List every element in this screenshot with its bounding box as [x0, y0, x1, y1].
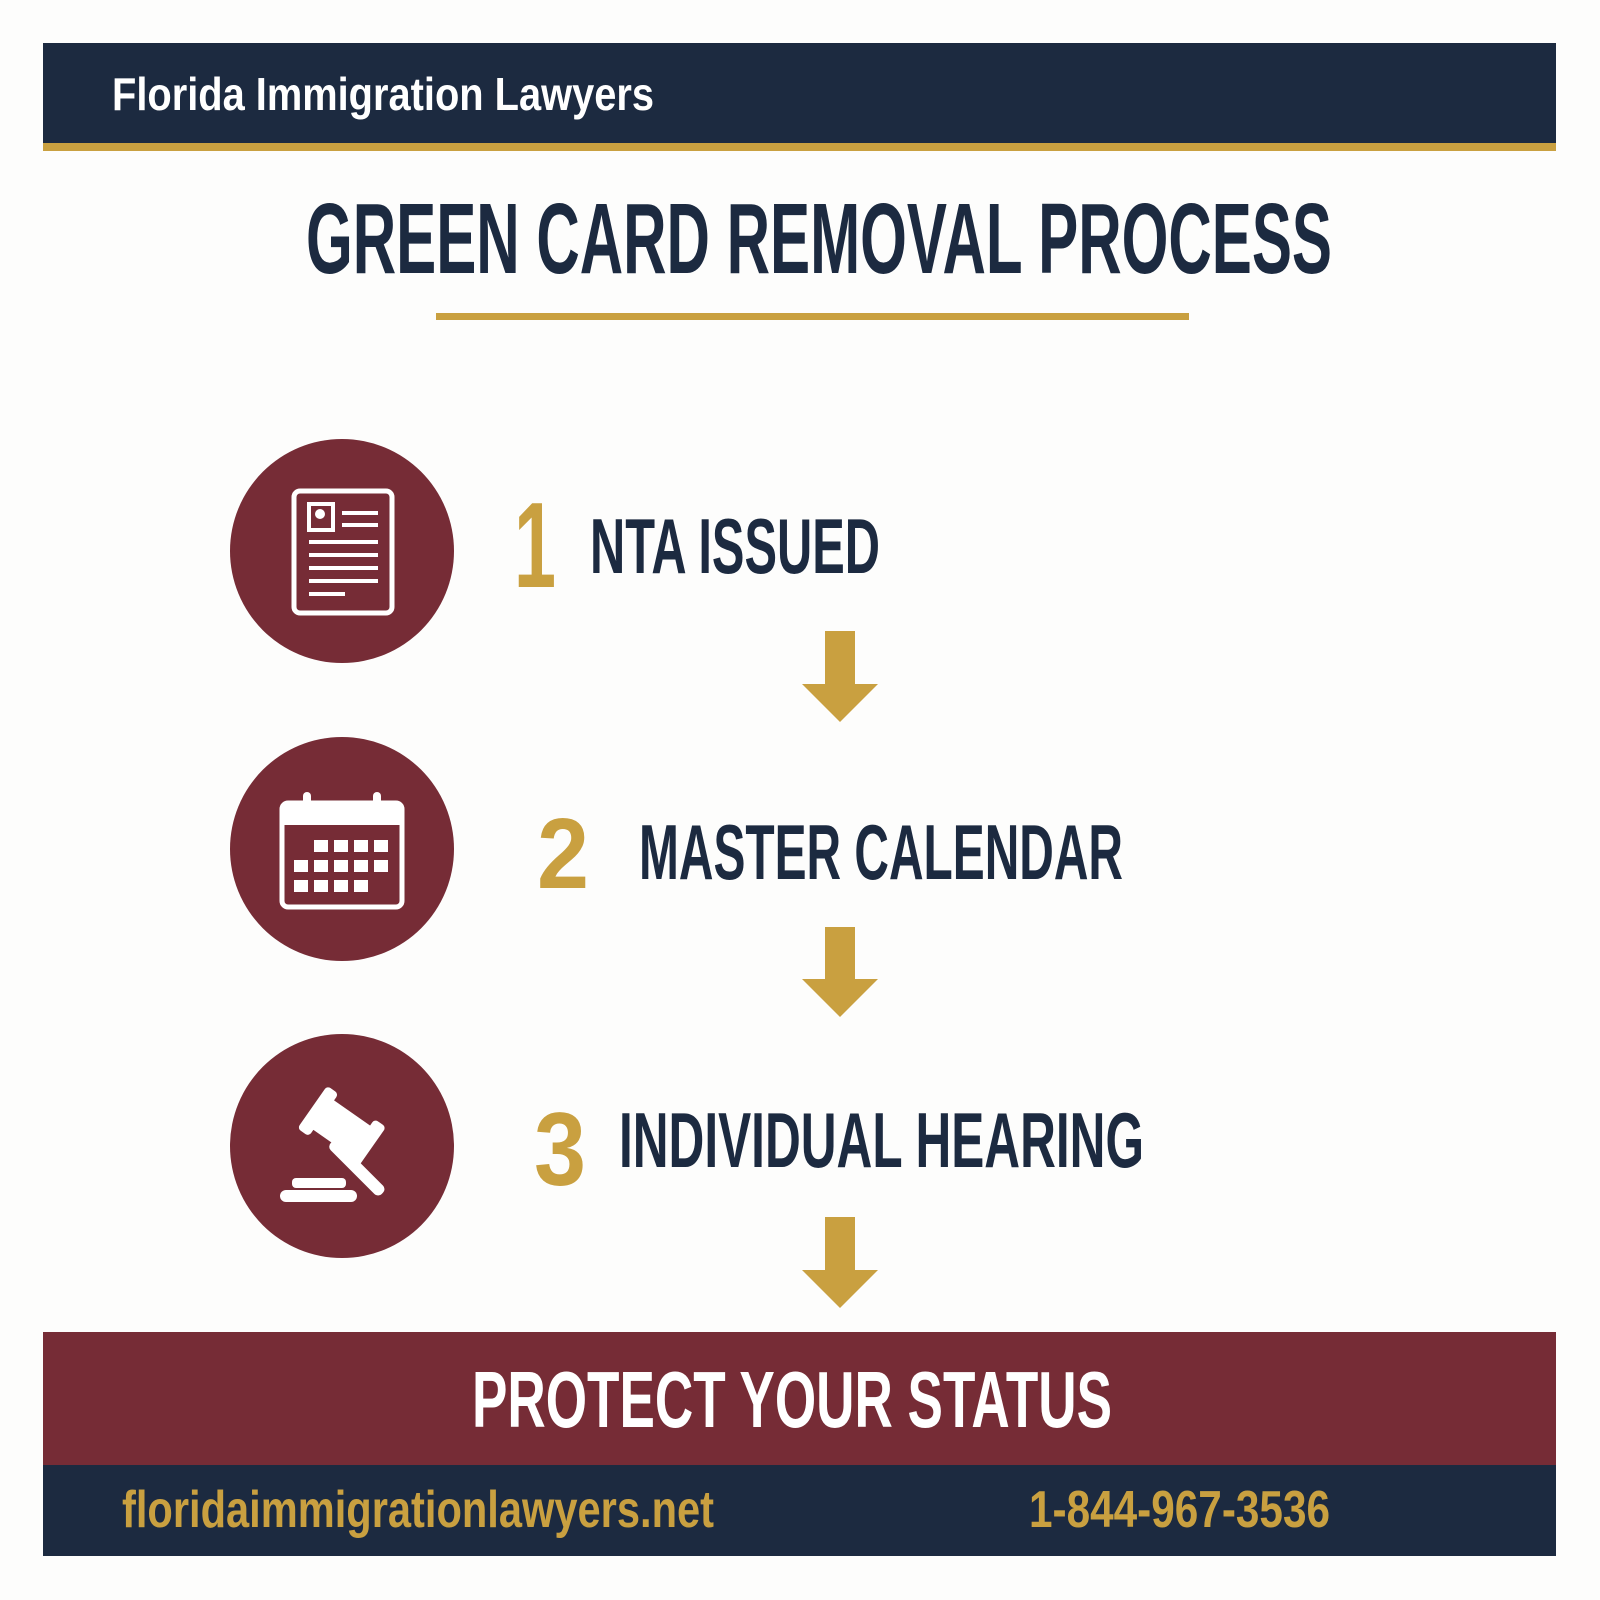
step 3	[230, 1034, 1144, 1258]
step 2	[230, 737, 1123, 961]
arrow 1	[802, 631, 878, 722]
step 1: 1	[514, 477, 556, 613]
step 3: 3	[534, 1092, 586, 1208]
title	[306, 183, 1332, 320]
icon: calendar	[230, 737, 454, 961]
step 2: 2	[537, 798, 589, 910]
step 1	[230, 439, 880, 663]
header bar	[43, 43, 1556, 151]
banner: protect your status	[43, 1332, 1556, 1465]
arrow 3	[802, 1217, 878, 1308]
footer: 1-844-967-3536	[1029, 1481, 1330, 1539]
footer	[43, 1465, 1556, 1556]
banner: protect your status: PROTECT YOUR STATUS	[472, 1355, 1112, 1444]
icon: gavel	[230, 1034, 454, 1258]
footer: floridaimmigrationlawyers.net	[122, 1481, 714, 1539]
step 3: INDIVIDUAL HEARING	[619, 1096, 1144, 1184]
arrow 2	[802, 927, 878, 1017]
step 2: MASTER CALENDAR	[639, 808, 1123, 896]
header bar: Florida Immigration Lawyers	[112, 68, 654, 120]
icon: document	[230, 439, 454, 663]
step 1: NTA ISSUED	[590, 502, 880, 590]
